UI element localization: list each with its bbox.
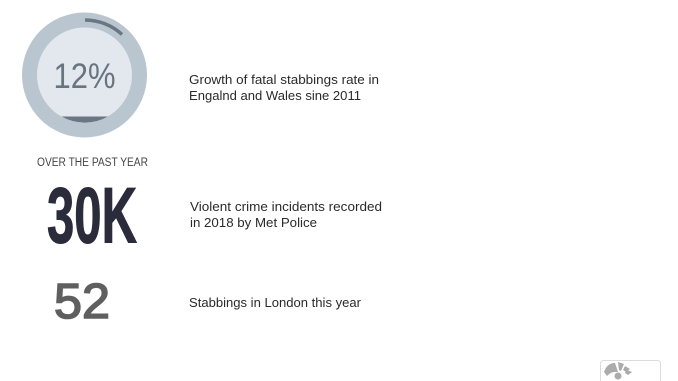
text: stabbings in London: Stabbings in London this year: [189, 295, 362, 310]
logo badge: [600, 360, 660, 381]
donut chart: 12%: [22, 12, 147, 138]
caption: over the past year: OVER THE PAST YEAR: [37, 157, 148, 169]
text: fatal stabbings growth: [189, 72, 379, 103]
text: fatal stabbings growth: Growth of fatal stabbings rate in: [189, 72, 379, 87]
text: violent crime incidents: [190, 199, 382, 230]
chord segment at bottom of donut: [62, 116, 108, 123]
percentage value: 12%: [54, 57, 116, 96]
text: fatal stabbings growth: Engalnd and Wales sine 2011: [189, 88, 361, 103]
big number: 30K: 30K: [47, 170, 137, 260]
progress arc: [85, 20, 122, 34]
big number: 52: 52: [54, 275, 110, 329]
text: violent crime incidents: Violent crime incidents recorded: [190, 199, 382, 214]
icon: paw mark: [604, 362, 632, 380]
text: violent crime incidents: in 2018 by Met Police: [190, 215, 317, 230]
